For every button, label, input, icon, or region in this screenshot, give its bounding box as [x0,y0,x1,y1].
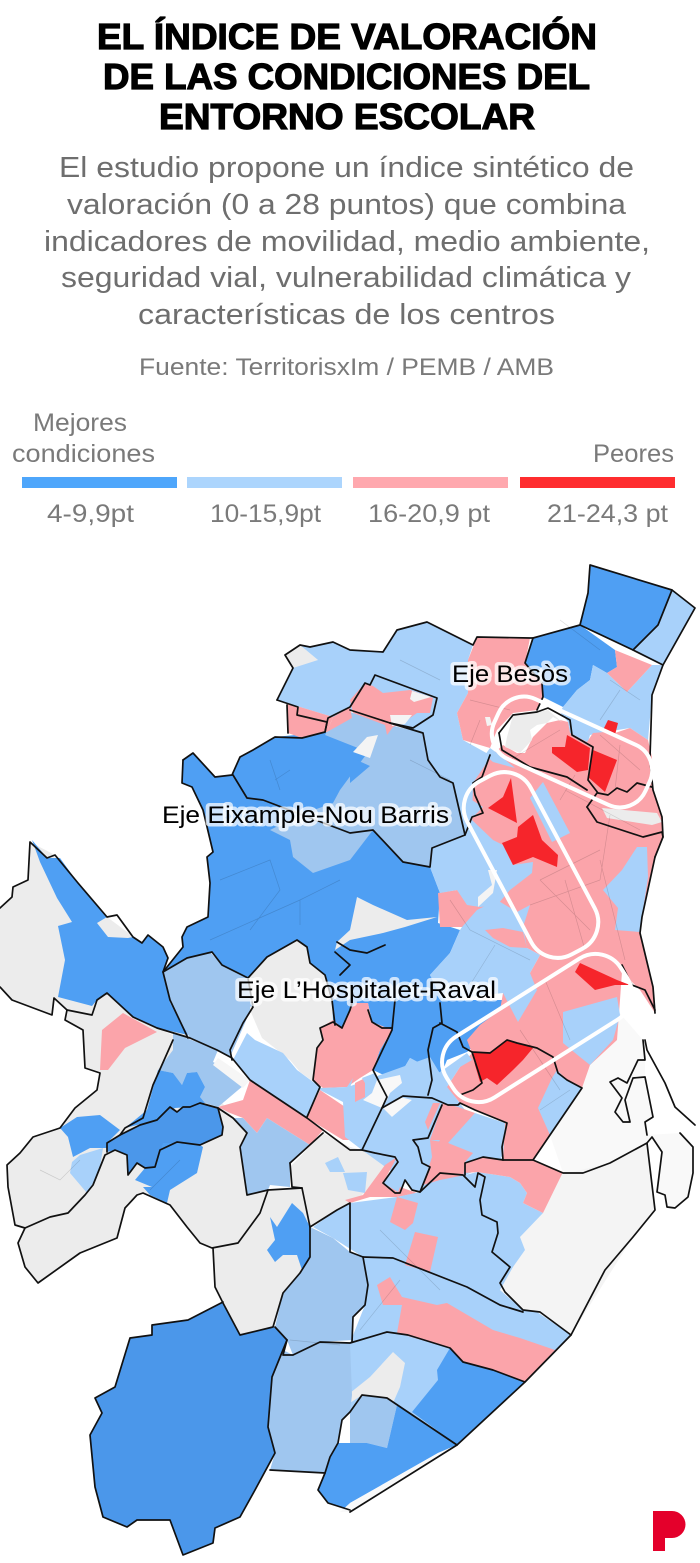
map: red small north [603,720,618,735]
map: light blue cell east [448,1113,505,1157]
map: muted Sant Joan south district [275,1227,368,1355]
map: pink Vallvidrera district [350,683,433,735]
map: pink rectangular cell [405,1232,438,1272]
map: light spots in grey [325,1157,367,1193]
map: muted Castelldefels inland [268,1342,352,1473]
map: white sliver [478,870,497,907]
map: blue patch in grey [267,1203,310,1270]
map: blue patch near hole [350,757,370,783]
map: grey hole near Nou Barris [353,735,378,758]
map: light blue Montjuïc area [563,997,620,1065]
legend: 10-15,9pt [187,477,342,528]
map: grey spot south [350,1352,405,1403]
legend: 16-20,9 pt: 16-20,9 pt [368,500,490,528]
cell: pink small [355,1078,365,1102]
map: small pink patch [485,928,527,948]
map: port and delta background [500,1010,693,1335]
map: pink wedge [345,1157,417,1203]
cell: white knot [363,1075,402,1108]
legend [12,409,675,528]
source line: Fuente: TerritorisxIm / PEMB / AMB [139,354,554,381]
map: light blue notch west [467,797,483,817]
map: main pink Barcelona area [438,720,663,1160]
map: pink diagonal band [377,1277,555,1382]
map: small cells [320,1073,412,1117]
map: internal neighbourhood lines [40,620,640,1345]
subtitle text [44,152,650,331]
legend: 4-9,9pt: 4-9,9pt [47,500,134,528]
map: muted Nou Barris district [270,712,465,873]
subtitle text: características de los centros [138,299,555,331]
map: light blue centre-west [233,1033,320,1117]
title: ENTORNO ESCOLAR [159,96,535,137]
map: light blue strip at Besòs [485,748,515,768]
map: light blue Sants south [538,1070,582,1135]
map: north-east pink patch [607,650,652,692]
legend: best conditions label [12,409,155,468]
map: east coast light blue [603,847,648,932]
map: big south-west blue municipality [90,1302,287,1555]
map: central Collserola blue area [163,732,505,1078]
map: light base of centre-south districts [340,1057,503,1192]
cell: light blue west of white [320,1078,357,1115]
map: white highlight frame Eje Eixample-Nou Barris [453,762,609,968]
map: red Hospitalet district [473,1040,533,1085]
map: pink sliver [327,707,352,732]
title: EL ÍNDICE DE VALORACIÓN [97,15,597,57]
map: south blue beach municipality [318,1398,457,1510]
map: blue patch south [135,1143,203,1203]
map: small pink north-west districts [287,703,333,738]
subtitle text: indicadores de movilidad, medio ambiente, [44,226,650,258]
legend: 10-15,9pt: 10-15,9pt [210,500,321,528]
map: white stripe [213,1058,250,1088]
map: muted area under strip [233,1118,310,1195]
map: red Ciutat Vella [575,963,630,990]
map: pink district centre [313,1003,392,1088]
map: red Nou Barris south [502,815,558,867]
map: north-east light strip [633,590,695,665]
legend: 21-24,3 pt [520,477,675,528]
map: grey beach strip [340,1445,457,1512]
map: municipal boundaries [0,565,695,1555]
map: pink sliver by line [425,1103,440,1130]
cell: light small [362,1073,382,1095]
map: pink vertical cell [390,1197,418,1230]
title [97,15,597,137]
map: grey Besòs river patches [505,710,662,825]
map: light blue Hospitalet band [432,1053,472,1105]
map: blue west patch [60,1115,120,1157]
map: southern light blue belt [313,1172,571,1445]
map: pink T cell [423,1140,473,1185]
map: white spot in Horta [485,717,492,726]
map: white spots in Vallvidrera [390,691,431,726]
map: pink long strip [218,1080,323,1145]
legend: best conditions label: condiciones [12,440,155,468]
map: pink Horta area [457,637,543,748]
title: DE LAS CONDICIONES DEL [103,56,590,97]
choropleth map [0,565,695,1555]
label: Eje Besòs: Eje Besòs [452,661,568,688]
map: white highlight frame Eje Besòs [483,688,661,816]
map: pink cell [430,1103,475,1145]
map: grey hole in central blue [335,897,437,950]
map: blue south-east wedge [412,1348,525,1445]
map: red district Besòs east [588,750,617,792]
map: dark blue district [107,1103,223,1175]
map: north blue Badalona area [525,625,617,707]
map: blue district [125,1070,205,1128]
subtitle text: El estudio propone un índice sintético de [59,152,634,184]
map: western grey municipalities [0,645,397,1335]
map: muted Sant Joan district [158,1033,250,1107]
map: southern light blue Barcelona [430,900,540,1022]
subtitle text: valoración (0 a 28 puntos) que combina [67,189,627,221]
map: western blue wedge [32,840,188,1035]
map: west light blue area [430,820,533,907]
legend: 21-24,3 pt: 21-24,3 pt [547,500,668,528]
map: light cell north of T [417,1140,440,1165]
map: muted south cell [350,1395,397,1448]
map: light blue cell under blue column [398,1058,432,1095]
subtitle text: seguridad vial, vulnerabilidad climática y [61,262,632,294]
legend: worst conditions label: Peores [593,440,674,468]
map: white highlight frame Eje L'Hospitalet-Raval [431,943,643,1113]
map: central light blue strip [530,782,570,842]
map: east light blue coastal area [560,665,663,745]
map: red district Besòs west [552,735,590,772]
map: light blue northern districts [277,622,490,835]
cell: white knot lower [383,1097,412,1117]
map: pink Prat top band [465,1157,563,1213]
map: pink district in the north-west grey area [100,1013,157,1070]
map: red Nou Barris north [488,778,517,823]
map: pink district second [307,1090,357,1140]
legend: best conditions label: Mejores [33,409,127,437]
legend: 4-9,9pt [22,477,177,528]
map: light blue Hospitalet south [343,1100,433,1193]
map: light blue west patch [70,1148,103,1193]
legend: 16-20,9 pt [353,477,508,528]
label: Eje Eixample-Nou Barris: Eje Eixample-Nou Barris [162,802,449,829]
map: muted Esplugues district [163,952,253,1057]
label: Eje L'Hospitalet-Raval: Eje L’Hospitalet-Raval [237,977,496,1004]
logo [653,1511,686,1551]
map: north-east blue tip [580,565,672,650]
